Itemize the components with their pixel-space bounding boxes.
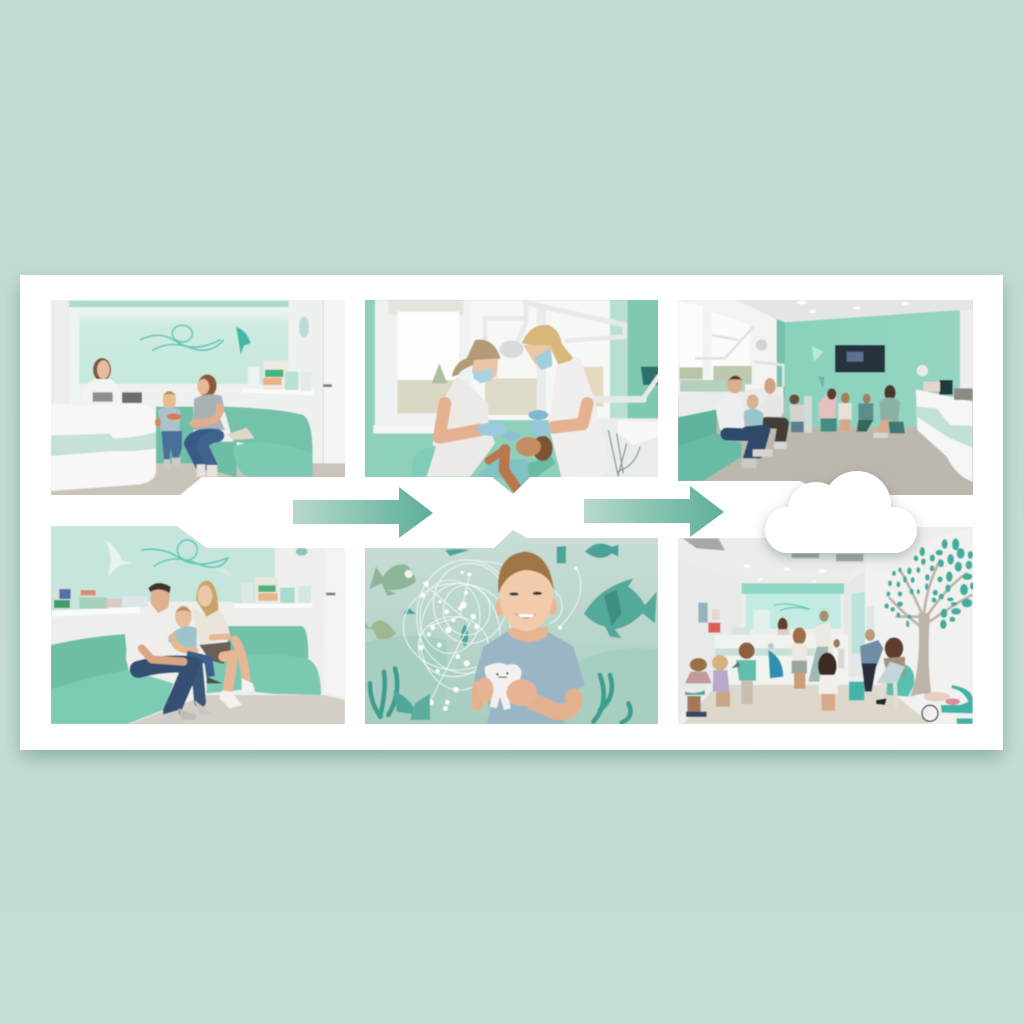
panel: busy lobby with tree mural bbox=[677, 525, 975, 725]
children group bbox=[685, 627, 844, 717]
right dentist bbox=[521, 324, 598, 477]
reception counter bbox=[916, 389, 973, 482]
wall logo bbox=[142, 540, 228, 567]
right shelf bbox=[234, 577, 312, 608]
wall birds bbox=[105, 539, 233, 577]
lamp arm bbox=[695, 327, 783, 387]
father shoes bbox=[162, 700, 212, 723]
teal wall right bbox=[628, 300, 659, 420]
wall signs bbox=[698, 603, 874, 635]
infographic canvas bbox=[10, 273, 1012, 766]
door bbox=[323, 549, 345, 699]
mother bbox=[192, 581, 255, 708]
seated family left bbox=[715, 375, 787, 468]
left dentist bbox=[427, 340, 520, 477]
right sofa bbox=[207, 626, 321, 695]
ceiling lights bbox=[797, 300, 909, 313]
left wall bbox=[678, 560, 742, 720]
small decor fish bbox=[403, 546, 566, 647]
father legs bbox=[138, 648, 200, 712]
floor bbox=[127, 695, 345, 725]
reception desk bbox=[51, 432, 156, 492]
receptionist bbox=[777, 618, 789, 635]
floor bbox=[50, 463, 347, 497]
shelf with brochures bbox=[243, 360, 313, 396]
sofa bbox=[156, 407, 313, 477]
network nodes bbox=[418, 567, 578, 711]
counter behind sofa bbox=[678, 380, 783, 417]
door bbox=[322, 300, 332, 463]
ceiling lights bbox=[744, 564, 826, 583]
floor bbox=[683, 685, 930, 724]
standing doctor bbox=[808, 610, 833, 682]
cushion bag bbox=[227, 428, 254, 440]
child standing bbox=[789, 394, 804, 432]
panel: waiting room with families bbox=[677, 298, 977, 498]
seated woman and child bbox=[876, 637, 914, 707]
seaweed bbox=[370, 668, 631, 723]
mint wall panel bbox=[51, 526, 275, 617]
seated group back wall bbox=[818, 385, 905, 438]
cloud bbox=[765, 471, 917, 553]
right wall bbox=[865, 527, 973, 724]
right corridor bbox=[844, 570, 865, 677]
network of white lines bbox=[403, 560, 581, 702]
panel: dentists treating child bbox=[363, 298, 660, 498]
lamp arms bbox=[485, 303, 658, 399]
lamp head bbox=[500, 341, 524, 358]
fish left bbox=[369, 564, 416, 596]
tree trunk bbox=[910, 613, 932, 697]
left sofa bbox=[51, 634, 173, 724]
reception desk bbox=[715, 635, 848, 683]
seated child bbox=[155, 391, 182, 469]
tree branches bbox=[890, 560, 972, 627]
panel: smiling boy with plush tooth bbox=[363, 530, 660, 727]
chair bbox=[412, 448, 555, 486]
child bbox=[168, 606, 223, 683]
ceiling bbox=[678, 538, 883, 585]
tooth display bbox=[753, 610, 770, 634]
boy bbox=[473, 552, 585, 724]
vents bbox=[683, 538, 863, 561]
big fish bbox=[584, 578, 657, 638]
left shelf bbox=[52, 587, 148, 617]
receptionist bbox=[81, 358, 142, 403]
tree leaves bbox=[884, 538, 974, 629]
water waves bbox=[365, 636, 658, 724]
person in blue bbox=[768, 643, 783, 678]
ceiling bbox=[735, 299, 973, 322]
father bbox=[126, 583, 171, 673]
top fish bbox=[585, 543, 618, 558]
wall teal band and panel bbox=[742, 583, 844, 629]
wall logo bbox=[141, 325, 223, 350]
wall birds bbox=[812, 346, 825, 388]
right window bbox=[471, 300, 628, 420]
table and stool bbox=[922, 685, 973, 724]
white card bbox=[20, 275, 1003, 750]
child patient bbox=[477, 436, 553, 488]
floor bbox=[678, 427, 973, 496]
wall bird bbox=[236, 327, 251, 355]
lamp head bbox=[756, 339, 767, 351]
clock bbox=[296, 548, 308, 556]
seated mother bbox=[191, 374, 225, 477]
TV bbox=[835, 345, 885, 372]
back wall logo bbox=[774, 604, 810, 611]
boy hands bbox=[477, 677, 537, 706]
medical cart bbox=[804, 396, 812, 433]
plush tooth bbox=[485, 663, 522, 710]
arrow: first step bbox=[293, 487, 433, 538]
seated man bbox=[860, 629, 883, 692]
left window bbox=[373, 300, 471, 433]
dental cart bbox=[599, 418, 658, 477]
back wall bbox=[785, 310, 960, 427]
arrow: second step bbox=[584, 486, 724, 537]
windows bbox=[677, 299, 777, 397]
wall dispenser bbox=[641, 367, 658, 385]
counter items bbox=[917, 365, 972, 400]
panel: family on sofa bbox=[50, 525, 347, 725]
teal bag bbox=[849, 682, 864, 700]
sofa bbox=[678, 409, 742, 481]
clock bbox=[299, 316, 309, 338]
panel: reception desk and waiting sofa bbox=[50, 298, 347, 498]
fish lower left bbox=[365, 620, 397, 639]
